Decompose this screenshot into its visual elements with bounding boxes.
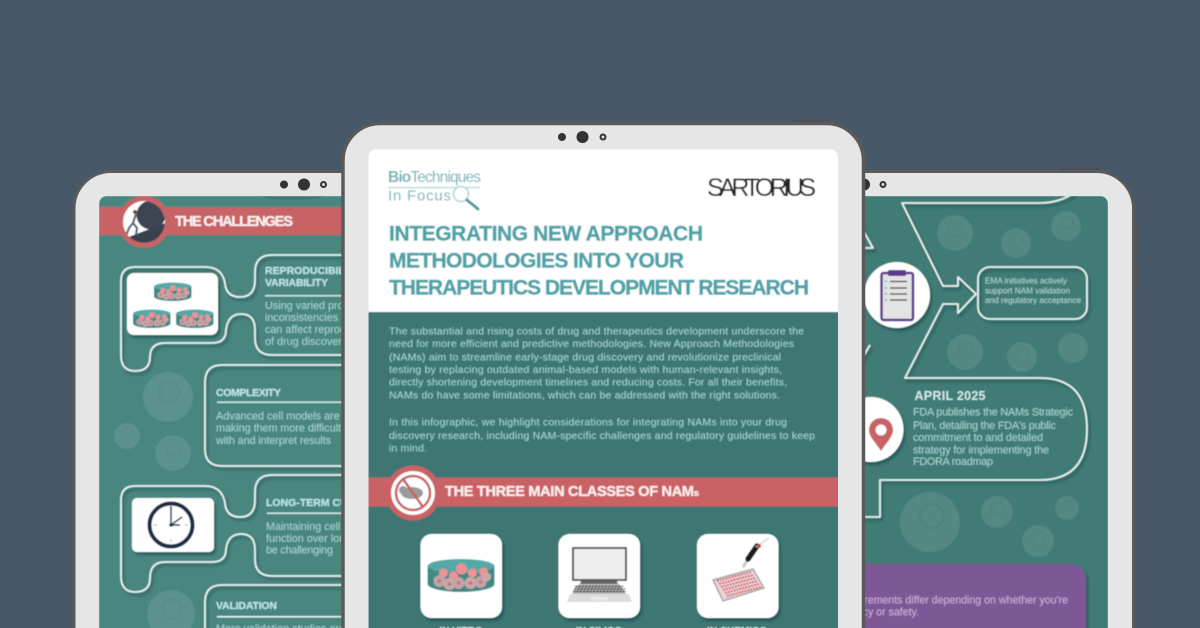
panel: complexity: COMPLEXITY: [216, 387, 281, 399]
panel: long-term culture: Maintaining cell: [266, 521, 340, 533]
icon: pipette and well plate: [713, 538, 769, 601]
text: April 2025 milestone: [913, 389, 1074, 468]
panel: validation: VALIDATION: [216, 600, 277, 612]
text block: introduction: NAMs do have some limitations, which can be addressed with the right solutions.: [389, 390, 780, 402]
panel: reproducibility and variability: [121, 255, 382, 371]
logo: BioTechniques In Focus: BioTechniques: [388, 169, 481, 186]
panel: reproducibility and variability: of drug discovery: [265, 336, 348, 348]
text: April 2025 milestone: Plan, detailing the FDA's public: [913, 420, 1057, 432]
text block: introduction: The substantial and rising costs of drug and therapeutics development underscore the: [389, 326, 804, 338]
panel: reproducibility and variability: VARIABILITY: [265, 277, 328, 289]
banner: three main classes of NAMs: THE THREE MAIN CLASSES OF NAMs: [445, 484, 699, 500]
logo: BioTechniques In Focus: [388, 169, 481, 209]
card: in vitro: [420, 534, 502, 628]
callout: EMA initiatives: and regulatory acceptance: [985, 296, 1081, 305]
text block: introduction: testing by replacing outdated animal-based models with human-relevant insights,: [389, 364, 782, 376]
text block: introduction: need for more efficient and predictive methodologies. New Approach Methodologies: [389, 338, 794, 350]
text block: introduction: in mind.: [389, 442, 427, 454]
panel: long-term culture: function over long: [266, 533, 351, 545]
icon: clipboard: [864, 262, 930, 328]
panel: reproducibility and variability: REPRODUCIBILITY: [265, 265, 361, 277]
panel: complexity: making them more difficult: [216, 422, 341, 434]
panel: reproducibility and variability: inconsistencies in: [265, 312, 350, 324]
icon: figure pushing boulder: [125, 200, 166, 244]
panel: complexity: [203, 363, 342, 471]
text block: introduction: (NAMs) aim to streamline early-stage drug discovery and revolutionize preclinical: [389, 352, 781, 364]
callout: purple note: Requirements differ depending on whether you're: [836, 594, 1068, 606]
text: April 2025 milestone: FDA publishes the NAMs Strategic: [913, 406, 1074, 418]
icon: three cell culture dishes: [127, 273, 218, 335]
panel: reproducibility and variability: Using varied protocols: [265, 300, 372, 312]
banner: three main classes of NAMs: [368, 466, 839, 520]
tablet: center, main infographic: [343, 120, 864, 628]
logo: BioTechniques In Focus: In Focus: [388, 188, 451, 204]
icon: map pin: [865, 396, 906, 466]
text: April 2025 milestone: APRIL 2025: [914, 389, 986, 403]
callout: EMA initiatives: [978, 267, 1087, 319]
tablet: left, the challenges: [72, 170, 342, 628]
card: in chemico: [697, 534, 778, 628]
icon: cell culture dish: [428, 559, 494, 592]
panel: complexity: Advanced cell models are complex: [216, 410, 383, 422]
text block: introduction: discovery research, including NAM-specific challenges and regulatory guidelines to keep: [389, 430, 815, 442]
banner: the challenges: [99, 196, 342, 249]
panel: reproducibility and variability: can affect reproducibility: [265, 324, 382, 336]
banner: the challenges: THE CHALLENGES: [175, 214, 293, 230]
logo: Sartorius: SARTORIUS: [707, 174, 816, 202]
icon: laptop: [567, 548, 632, 602]
callout: purple note: [865, 564, 1089, 628]
text: April 2025 milestone: strategy for implementing the: [913, 444, 1049, 456]
text block: introduction: directly shortening development timelines and reducing costs. For all their benefits,: [389, 376, 787, 388]
tablet: right, regulatory timeline: [865, 168, 1138, 628]
card: in silico: [558, 534, 640, 628]
callout: EMA initiatives: EMA initiatives actively: [985, 276, 1068, 286]
icon: no animal testing: [396, 476, 430, 510]
callout: purple note: efficacy or safety.: [838, 606, 919, 618]
text: April 2025 milestone: FDORA roadmap: [913, 456, 993, 468]
text: April 2025 milestone: commitment to and detailed: [913, 432, 1043, 444]
panel: complexity: with and interpret results: [215, 435, 332, 447]
title: THERAPEUTICS DEVELOPMENT RESEARCH: [389, 276, 809, 300]
panel: long-term culture: LONG-TERM CULTURE: [266, 497, 382, 509]
callout: EMA initiatives: support NAM validation: [985, 286, 1070, 296]
text block: introduction: [389, 326, 815, 454]
arrow: timeline connector: [860, 192, 1087, 517]
panel: long-term culture: [121, 475, 382, 592]
panel: long-term culture: be challenging: [266, 544, 333, 556]
title: INTEGRATING NEW APPROACH: [389, 222, 703, 246]
text block: introduction: In this infographic, we highlight considerations for integrating NAMs into your drug: [389, 416, 787, 428]
panel: validation: [205, 585, 350, 628]
title: METHODOLOGIES INTO YOUR: [389, 250, 684, 272]
title: [389, 222, 809, 300]
icon: clock: [132, 498, 214, 552]
